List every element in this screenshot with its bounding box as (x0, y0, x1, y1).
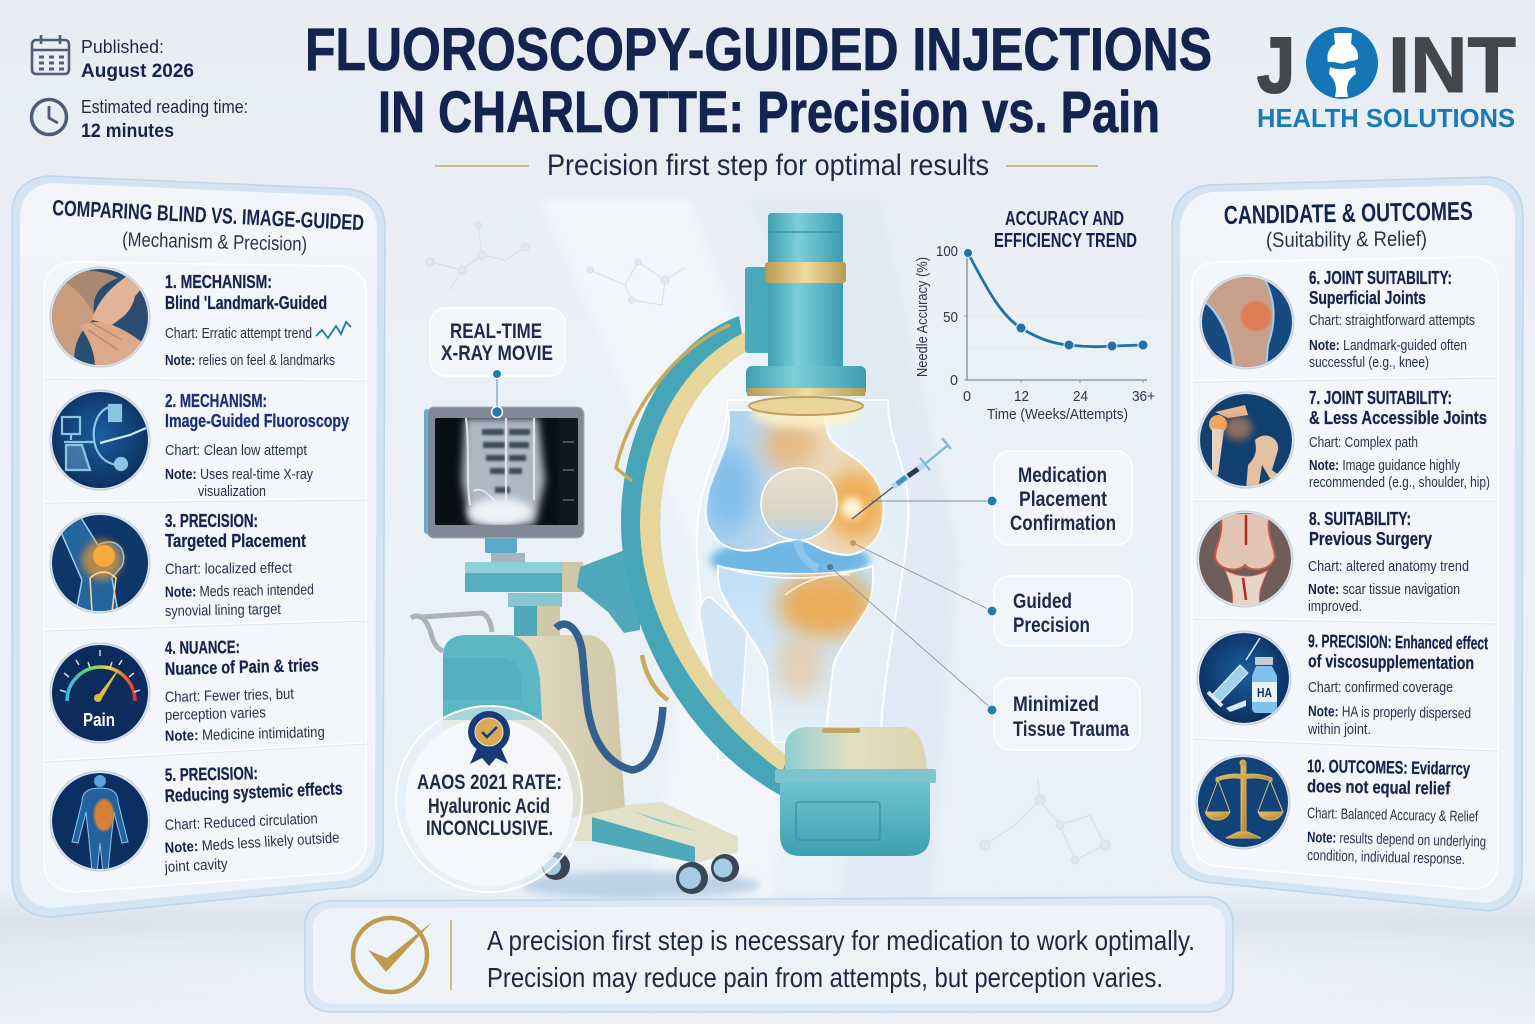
row 4: nuance of pain: Note: Medicine intimidating (165, 724, 325, 745)
row 7: less accessible joints: recommended (e.g., shoulder, hip) (1309, 474, 1490, 491)
row 6: superficial joints: Note: Landmark-guided often (1309, 337, 1467, 354)
callout: minimized tissue trauma: Minimized (1013, 693, 1099, 716)
icon: syringe (852, 438, 951, 519)
row 4: nuance of pain: 4. NUANCE: (165, 637, 240, 658)
callout: guided precision (987, 576, 1132, 646)
row 1: blind landmark-guided: Blind 'Landmark-Guided (165, 293, 327, 313)
row 2: image-guided fluoroscopy: 2. MECHANISM: (165, 391, 267, 411)
row 8: previous surgery: Chart: altered anatomy trend (1308, 558, 1469, 575)
row 5: reducing systemic effects: Reducing systemic effects (164, 778, 343, 806)
row 10: outcomes: condition, individual response. (1307, 847, 1465, 868)
chart: accuracy and efficiency trend: Time (Weeks/Attempts) (987, 406, 1128, 423)
published info: Published: (81, 37, 164, 57)
row 3: targeted placement: synovial lining target (165, 601, 282, 620)
row 9: viscosupplementation: of viscosupplementation (1308, 651, 1474, 673)
row 8: previous surgery: Previous Surgery (1309, 529, 1432, 549)
callout: real-time x-ray movie: REAL-TIME (450, 320, 542, 343)
row 2: image-guided fluoroscopy: Note: Uses real-time X-ray (165, 466, 313, 483)
callout: guided precision: Guided (1013, 590, 1072, 613)
callout: minimized tissue trauma: Tissue Trauma (1013, 718, 1129, 741)
row 10: outcomes (1196, 755, 1486, 868)
row 9: viscosupplementation (1197, 631, 1488, 738)
row 3: targeted placement (50, 511, 314, 620)
callout: medication placement confirmation: Confirmation (1010, 512, 1116, 535)
callout: AAOS rating: Hyaluronic Acid (428, 795, 550, 818)
logo: INT (1388, 20, 1516, 109)
monitor with x-ray (424, 407, 584, 562)
chart: accuracy and efficiency trend: Needle Accuracy (%) (914, 257, 931, 377)
icon: rosette badge (468, 711, 510, 766)
callout lines: guided precision and tissue trauma (827, 540, 992, 709)
icon: balance scales (1196, 755, 1290, 849)
logo: HEALTH SOLUTIONS (1257, 103, 1515, 133)
bottom takeaway bar: A precision first step is necessary for medication to work optimally. (487, 925, 1195, 956)
callout: real-time x-ray movie: X-RAY MOVIE (441, 342, 553, 365)
callout: medication placement confirmation (987, 451, 1132, 545)
chart: accuracy and efficiency trend: 100 (936, 243, 958, 260)
logo (1257, 20, 1516, 133)
row 10: outcomes: Chart: Balanced Accuracy & Relief (1307, 805, 1479, 826)
icon: knee logo (1306, 27, 1378, 99)
row 3: targeted placement: Targeted Placement (165, 531, 306, 551)
callout: AAOS rating: AAOS 2021 RATE: (417, 771, 562, 794)
row 9: viscosupplementation: within joint. (1307, 721, 1371, 738)
chart: accuracy and efficiency trend: 12 (1014, 388, 1029, 405)
row 2: image-guided fluoroscopy: visualization (198, 483, 266, 500)
row 7: less accessible joints: Chart: Complex path (1309, 434, 1418, 451)
callout: AAOS rating (396, 706, 582, 892)
icon: scarred knee (1197, 511, 1293, 607)
reading time: Estimated reading time: (81, 97, 248, 117)
icon: glowing knee (50, 513, 150, 613)
panel: comparing blind vs image-guided (12, 176, 385, 917)
logo: J (1257, 20, 1295, 109)
row 5: reducing systemic effects: Note: Meds less likely outside (164, 829, 340, 857)
chart: accuracy and efficiency trend: EFFICIENCY TREND (994, 230, 1137, 252)
row 8: previous surgery (1197, 509, 1469, 615)
row 2: image-guided fluoroscopy (50, 390, 349, 500)
title (305, 16, 1212, 145)
row 6: superficial joints: 6. JOINT SUITABILITY: (1309, 268, 1452, 288)
row 6: superficial joints: successful (e.g., knee) (1309, 354, 1429, 371)
icon: shoulder and hip bones (1198, 392, 1294, 490)
lower housing (775, 727, 936, 856)
reading time (32, 97, 248, 142)
published info: August 2026 (81, 61, 194, 82)
row 4: nuance of pain: perception varies (165, 704, 266, 724)
row 6: superficial joints: Chart: straightforward attempts (1309, 312, 1475, 329)
callout: AAOS rating: INCONCLUSIVE. (426, 817, 553, 840)
machine base (411, 550, 739, 894)
chart: accuracy and efficiency trend: 36+ (1132, 388, 1155, 405)
row 5: reducing systemic effects: joint cavity (163, 856, 229, 876)
row 2: image-guided fluoroscopy: Chart: Clean low attempt (165, 442, 308, 459)
icon: gold check circle (353, 918, 432, 992)
callout: minimized tissue trauma (987, 678, 1140, 750)
published info (32, 35, 194, 82)
row 9: viscosupplementation: Note: HA is properly dispersed (1308, 703, 1471, 722)
icon: c-arm (50, 390, 150, 490)
callout line: medication placement (871, 500, 992, 502)
row 6: superficial joints (1200, 268, 1475, 371)
x-ray tube head (745, 213, 866, 428)
icon: clock (32, 100, 66, 134)
row 7: less accessible joints: & Less Accessible Joints (1309, 408, 1487, 428)
icon: erratic sparkline (316, 322, 351, 338)
patella (761, 468, 837, 540)
row 4: nuance of pain (50, 637, 325, 745)
row 1: blind landmark-guided (50, 267, 351, 369)
callout: guided precision: Precision (1013, 614, 1090, 637)
bottom takeaway bar: Precision may reduce pain from attempts, but perception varies. (487, 962, 1163, 993)
tibia (718, 566, 873, 742)
chart: accuracy and efficiency trend (914, 208, 1155, 423)
row 10: outcomes: does not equal relief (1307, 776, 1451, 799)
c-arm curve (616, 316, 788, 795)
bottom takeaway bar (305, 897, 1233, 1012)
callout: real-time x-ray movie (430, 308, 565, 418)
icon: pain gauge: Pain (83, 710, 115, 730)
panel heading: (Mechanism & Precision) (122, 229, 307, 256)
row 1: blind landmark-guided: Chart: Erratic attempt trend (165, 325, 312, 342)
chart: accuracy and efficiency trend: 24 (1073, 388, 1088, 405)
icon: calendar (32, 35, 69, 74)
knee illustration (697, 400, 992, 760)
icon: hands on joint (50, 267, 150, 368)
row 10: outcomes: 10. OUTCOMES: Evidarrcy (1307, 756, 1470, 779)
title: IN CHARLOTTE: Precision vs. Pain (378, 80, 1160, 145)
chart: accuracy and efficiency trend: 0 (950, 372, 958, 389)
row 8: previous surgery: Note: scar tissue navigation (1308, 581, 1460, 598)
row 7: less accessible joints: 7. JOINT SUITABILITY: (1309, 388, 1452, 408)
row 3: targeted placement: 3. PRECISION: (165, 511, 258, 531)
panel heading: (Suitability & Relief) (1266, 228, 1427, 252)
row 1: blind landmark-guided: 1. MECHANISM: (165, 272, 272, 292)
icon: body with glow (50, 771, 150, 872)
title: FLUOROSCOPY-GUIDED INJECTIONS (305, 16, 1212, 83)
row 5: reducing systemic effects (50, 763, 343, 876)
row 4: nuance of pain: Chart: Fewer tries, but (165, 686, 295, 706)
row 6: superficial joints: Superficial Joints (1309, 288, 1426, 308)
row 5: reducing systemic effects: Chart: Reduced circulation (164, 810, 318, 834)
icon: syringe and HA vial (1197, 631, 1291, 725)
row 8: previous surgery: improved. (1308, 598, 1362, 615)
row 1: blind landmark-guided: Note: relies on feel & landmarks (165, 352, 335, 369)
row 10: outcomes: Note: results depend on underlying (1307, 829, 1486, 851)
row 7: less accessible joints: Note: Image guidance highly (1309, 457, 1460, 474)
row 3: targeted placement: Chart: localized effect (165, 560, 293, 578)
panel heading (52, 195, 365, 256)
icon: syringe and HA vial: HA (1257, 685, 1272, 700)
chart: accuracy and efficiency trend: 0 (963, 388, 971, 405)
icon: pain gauge (50, 643, 150, 743)
icon: knee skin (1200, 272, 1295, 370)
c-arm machine (411, 213, 936, 894)
row 3: targeted placement: Note: Meds reach intended (165, 581, 314, 601)
subtitle: Precision first step for optimal results (547, 149, 989, 182)
row 7: less accessible joints (1198, 388, 1490, 491)
femur (706, 410, 885, 555)
row 8: previous surgery: 8. SUITABILITY: (1309, 509, 1411, 529)
panel heading (1224, 196, 1473, 252)
panel: candidate and outcomes (1172, 177, 1523, 911)
chart: accuracy and efficiency trend: ACCURACY AND (1005, 208, 1124, 230)
row 4: nuance of pain: Nuance of Pain & tries (165, 655, 319, 679)
row 2: image-guided fluoroscopy: Image-Guided Fluoroscopy (165, 411, 349, 431)
reading time: 12 minutes (81, 121, 174, 142)
callout: medication placement confirmation: Medication (1018, 464, 1107, 487)
callout: medication placement confirmation: Placement (1019, 488, 1107, 511)
chart: accuracy and efficiency trend: 50 (943, 309, 958, 326)
panel heading: COMPARING BLIND VS. IMAGE-GUIDED (52, 195, 365, 235)
row 9: viscosupplementation: Chart: confirmed coverage (1308, 679, 1453, 696)
row 5: reducing systemic effects: 5. PRECISION: (165, 763, 258, 785)
